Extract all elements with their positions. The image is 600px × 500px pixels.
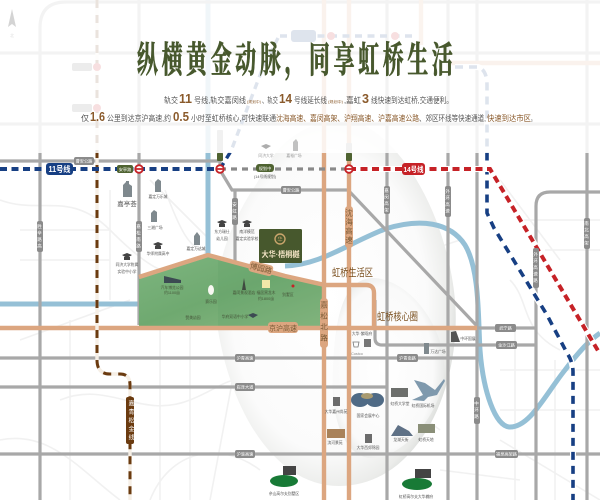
poi: 三湘广场: 三湘广场 (147, 225, 163, 230)
label: 安亭路 station (117, 165, 133, 173)
project marker: 大华·梧桐樾: 华 (277, 236, 283, 243)
label: 14号线 (402, 163, 425, 175)
heading: 虹桥生活区: 虹桥生活区 (332, 266, 373, 279)
poi: 国家会展中心: 国家会展中心 (357, 413, 380, 418)
text: intro line 1: 号线,轨交嘉闵线 (194, 95, 246, 105)
icon and label: 南洋模范嘉定实验学校: 嘉定实验学校 (236, 236, 259, 241)
poi: Costco (351, 342, 363, 356)
label: 规划中 station: 规划中 (259, 165, 271, 172)
poi: 虹桥天地: 虹桥天地 (418, 437, 434, 442)
text: intro line 1: (规划中) (247, 99, 261, 104)
poi: 国家会展中心 (351, 393, 384, 418)
text: intro line 1: 14 (279, 91, 293, 106)
faded map markers at top (72, 30, 399, 154)
green residential zone (139, 257, 323, 326)
text: intro line 2 (81, 109, 535, 124)
icon: north arrow: 北 (10, 33, 14, 38)
icon and label: 华师附属高中: 华师附属高中 (147, 251, 170, 256)
text: intro line 1: 线快速到达虹桥,交通便利。 (371, 95, 453, 105)
road pills: 沪青高速 (237, 354, 254, 362)
pill: 京沪高速: 京沪高速 (269, 324, 297, 332)
zone: Hongqiao living area egg (216, 118, 456, 486)
pill: 京沪高速 (268, 322, 298, 333)
icon: golf villa 佘山 (269, 466, 299, 496)
road pills: 中环路 (474, 400, 480, 420)
poi: 嘉亭荟: 嘉亭荟 (117, 199, 137, 208)
poi: 嘉闵景观酒店: 嘉闵景观酒店 (233, 290, 256, 295)
poi: 龙湖天街 (391, 425, 413, 442)
label: 11号线: 11号线 (48, 164, 70, 174)
road pills: 福泉高架路 (496, 450, 518, 458)
title: 纵横黄金动脉，同享虹桥生活 (137, 40, 457, 82)
text: intro line 2: 。 (531, 114, 535, 123)
text: intro line 1: 、轨交 (262, 95, 278, 105)
poi: 中环国展 (451, 331, 476, 342)
icon: golf villa 佘山: 佘山高尔夫别墅区 (269, 491, 299, 496)
poi: 赞美幼园: 赞美幼园 (185, 315, 201, 320)
white fade at top of map (0, 0, 600, 153)
poi: 龙湖天街: 龙湖天街 (393, 437, 409, 442)
metro line 14 (220, 169, 600, 354)
poi: 汽车博览公园: 约1100亩 (164, 290, 180, 295)
label: 14号线: 14号线 (404, 164, 424, 174)
icon: airplane and 虹桥国际机场: 虹桥国际机场 (412, 403, 435, 408)
label: 嘉华广场: 嘉裕广场 (286, 153, 302, 158)
poi: 赛乐园: 赛乐园 (205, 299, 217, 304)
residential POIs north-west (116, 139, 302, 274)
pill: 沈海高速: 沈海高速 (344, 208, 354, 245)
icon and label: 同济大学附属实验中小学: 实验中小学 (118, 269, 137, 274)
icon: golf villa 虹桥: 虹桥高尔夫大华樾府 (399, 494, 433, 499)
text: intro line 2: 仅 (81, 113, 89, 123)
text: intro line 1: (规划中) (328, 99, 343, 104)
text: intro line 2: 0.5 (173, 109, 189, 124)
poi: 虹桥大学堂 (391, 388, 410, 406)
text: intro line 1: 11 (179, 91, 192, 106)
poi: 别墅区: 别墅区 (282, 292, 294, 297)
road pills: 外环高速路 (533, 251, 538, 284)
poi: 虹桥大学堂: 虹桥大学堂 (391, 401, 410, 406)
label: 规划中 station (254, 164, 277, 179)
icon and label: 同济大学: 同济大学 (258, 153, 274, 158)
faint base street map (0, 180, 600, 500)
road pills: 曹安公路 (76, 158, 93, 164)
text: intro line 1: 轨交 (164, 95, 178, 105)
pill: 嘉青松金线 (126, 397, 134, 444)
icon and label: 东方瑞仕幼儿园: 幼儿园 (216, 236, 228, 241)
icon and label: 同济大学附属实验中小学: 同济大学附属 (116, 262, 139, 267)
text: intro line 1: 3 (362, 91, 369, 106)
icon and label: 同济大学 (258, 144, 274, 158)
poi: 三湘广场 (147, 210, 163, 230)
poi: 虹桥天地 (418, 424, 435, 442)
road pills: 嘉闵高架 (384, 187, 390, 214)
project marker: 大华·梧桐樾: 大华·梧桐樾 (262, 249, 300, 259)
poi: 嘉定万达城 (187, 232, 206, 251)
icon and label: 东方瑞仕幼儿园 (214, 220, 230, 241)
text: intro line 2: 、郊区环线等快速通道, (419, 113, 486, 123)
POIs in Hongqiao core (325, 331, 476, 450)
pill: 嘉青松金线: 嘉青松金线 (127, 399, 134, 442)
station tags (217, 153, 352, 161)
poi: 大华·紫曦府: 大华·紫曦府 (352, 331, 372, 336)
poi: 大华西郊锦园: 大华西郊锦园 (357, 445, 380, 450)
icon and label: 华师附属高中 (147, 242, 170, 256)
green zone darker part (218, 260, 323, 326)
poi: 汽车博览公园 (161, 276, 184, 295)
text: intro line 1 (164, 91, 453, 106)
poi: 滨河景苑: 滨河景苑 (327, 440, 343, 445)
pill: 嘉松北路: 嘉松北路 (319, 300, 328, 345)
text: intro line 1: 号线延长线 (294, 95, 327, 105)
poi: 万达广场 (424, 343, 446, 354)
icon: metro stations (135, 165, 353, 173)
pill: 博园路: 博园路 (249, 260, 274, 276)
label: 嘉华广场 (286, 139, 302, 158)
heading: 虹桥核心圈: 虹桥核心圈 (377, 310, 418, 323)
icon and label: 南洋模范嘉定实验学校 (236, 220, 259, 241)
icon: airplane and 虹桥国际机场 (412, 379, 445, 408)
road pills: 沪青南路 (399, 354, 417, 362)
POIs in green zone (161, 276, 294, 320)
poi: 嘉定万乐城 (149, 179, 168, 199)
icon and label: 南洋模范嘉定实验学校: 南洋模范 (239, 229, 255, 234)
poi: 汽车博览公园: 汽车博览公园 (161, 285, 184, 290)
label: 11号线 (46, 163, 73, 175)
road pills: 胜辛路高 (37, 223, 42, 250)
poi: 福居黑龙木 (257, 280, 276, 301)
metro line 嘉青松金线 (97, 0, 130, 500)
poi: 大华嘉州尚苑 (325, 397, 348, 414)
road pills: 武宁路 (499, 324, 513, 332)
text: intro line 2: 沈海高速、嘉闵高架、沪翔高速、沪嘉高速公路 (276, 113, 419, 123)
text: intro line 2: 快速到达市区 (487, 113, 531, 123)
road pills: 曹安公路 (283, 186, 300, 194)
road pills: 沪渝高速 (237, 450, 254, 458)
label: 规划中 station: (14号线规划) (254, 174, 277, 179)
icon: golf villa 虹桥 (399, 469, 433, 499)
poi: 滨河景苑 (327, 429, 345, 445)
poi: 嘉定万达城: 嘉定万达城 (187, 246, 206, 251)
poi: 嘉亭荟 (117, 181, 137, 208)
road pills: 金沙江路 (498, 342, 516, 348)
poi: 大华·紫曦府 (352, 331, 372, 347)
poi: 福居黑龙木: 福居黑龙木 (257, 290, 276, 295)
road pills: 南北高架 (584, 220, 590, 247)
poi: 中环国展: 中环国展 (460, 336, 476, 341)
text: intro line 1: ,嘉虹 (344, 95, 361, 105)
poi: 福居黑龙木: 约1800亩 (258, 296, 274, 301)
road pills: 外环高速 (445, 188, 450, 215)
poi: 嘉定万乐城: 嘉定万乐城 (149, 194, 168, 199)
label: 安亭路 station: 安亭路 (119, 166, 132, 173)
road pills: 嘉松南路 (136, 223, 142, 250)
project marker: 大华·梧桐樾 (259, 229, 302, 263)
road pills (37, 157, 590, 458)
poi: 万达广场: 万达广场 (430, 349, 446, 354)
text: intro line 2: 小时至虹桥核心,可快速联通 (191, 113, 276, 123)
road pills: 安虹路 (232, 201, 238, 222)
poi: 华府双语中小学: 华府双语中小学 (222, 314, 248, 319)
icon and label: 同济大学附属实验中小学 (116, 253, 139, 274)
zone: Hongqiao core egg (333, 278, 444, 458)
icon: north arrow (8, 9, 16, 38)
text: intro line 2: 1.6 (90, 109, 105, 124)
poi: 大华嘉州尚苑: 大华嘉州尚苑 (325, 409, 348, 414)
icon and label: 东方瑞仕幼儿园: 东方瑞仕 (214, 229, 230, 234)
poi: 大华西郊锦园 (357, 434, 380, 450)
text: intro line 2: 公里到达京沪高速,约 (107, 113, 171, 123)
road pills: 崧泽大道 (237, 384, 254, 390)
poi: Costco: Costco (351, 352, 363, 356)
